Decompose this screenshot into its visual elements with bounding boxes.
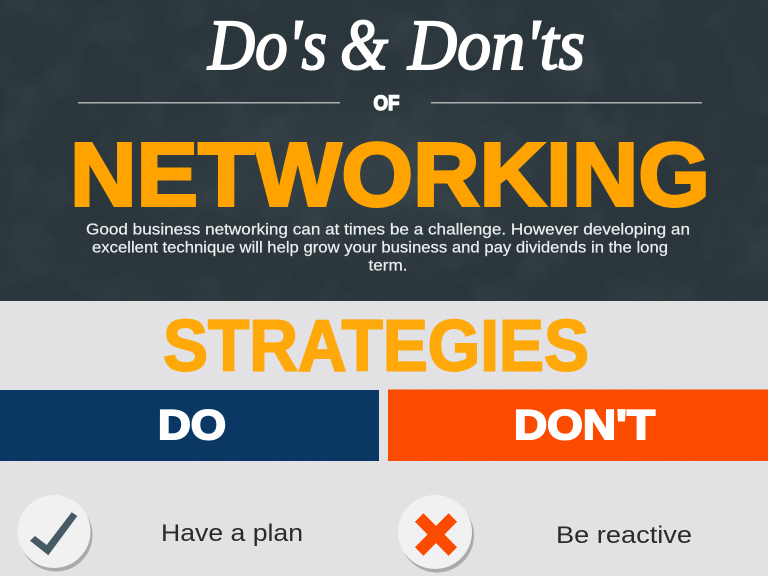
title: Do's & Don'ts: Do's: [207, 5, 327, 85]
column header: DON'T: [388, 390, 768, 461]
heading: NETWORKING: NETWORKING: [70, 126, 710, 226]
text: Have a plan: Have a plan: [161, 520, 303, 547]
text block: introduction: [86, 222, 690, 274]
text block: introduction: excellent technique will help grow your business and pay dividends in the long: [92, 240, 668, 256]
title: Do's & Don'ts: &: [340, 5, 388, 85]
divider: right rule: [431, 102, 702, 104]
panel: strategies background: [0, 301, 768, 576]
column header: DO: [0, 390, 379, 461]
text block: introduction: term.: [368, 258, 408, 274]
divider: left rule: [78, 102, 340, 104]
icon: cross mark: [398, 495, 474, 572]
title: Do's & Don'ts: Don'ts: [407, 5, 585, 85]
panel: header background: [0, 0, 768, 301]
heading: STRATEGIES: STRATEGIES: [163, 306, 589, 386]
heading: OF: OF: [374, 92, 400, 115]
text: Be reactive: Be reactive: [556, 522, 692, 549]
text block: introduction: Good business networking can at times be a challenge. However developing an: [86, 222, 690, 238]
icon: check mark: [18, 495, 92, 572]
column header: DO: DO: [158, 401, 226, 448]
title: Do's & Don'ts: [207, 5, 585, 85]
column header: DON'T: DON'T: [514, 401, 655, 448]
